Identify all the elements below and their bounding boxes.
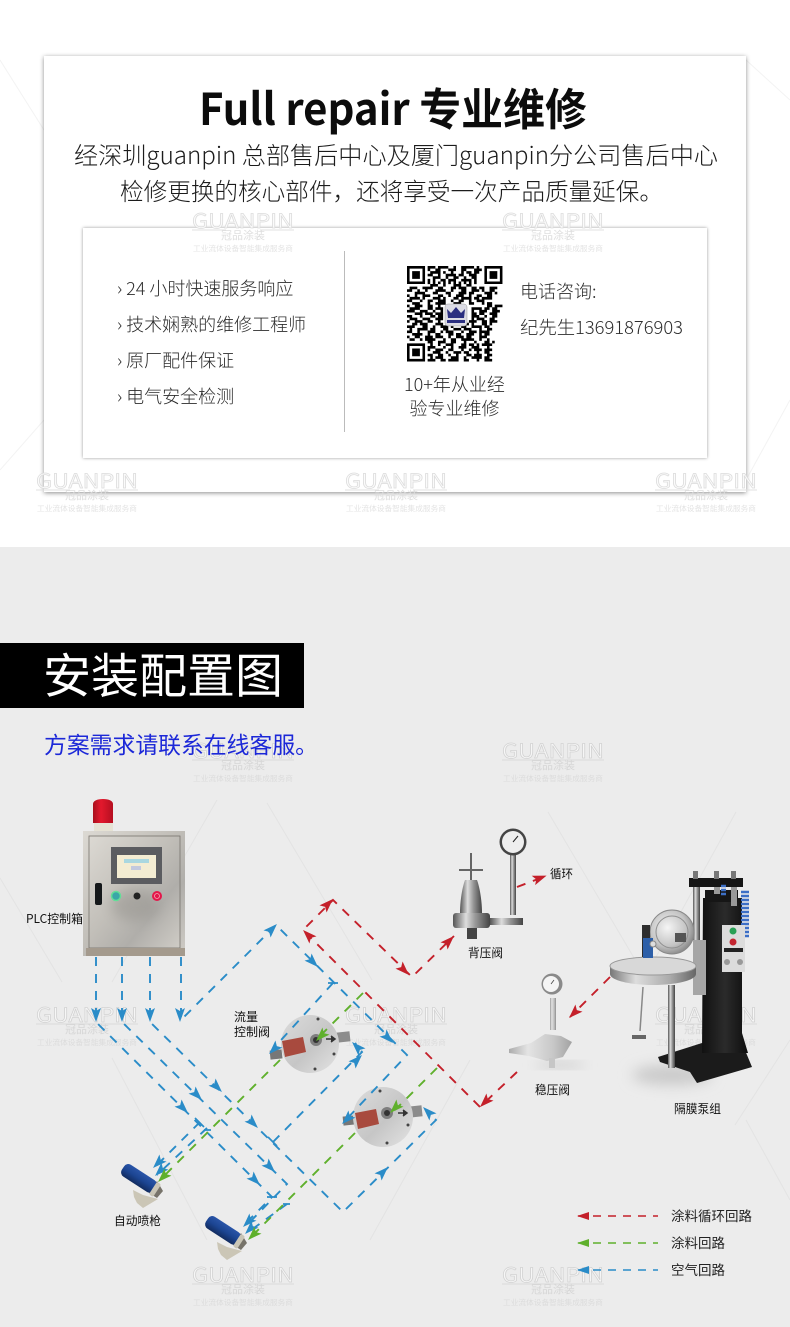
watermarks: GUANPIN [345,465,447,494]
blue air lines [96,925,436,1233]
label: PLC control box: PLC控制箱 [26,910,83,927]
watermarks: GUANPIN [655,999,757,1028]
service list: › 电气安全检测 [117,383,234,409]
watermarks: 工业流体设备智能集成服务商 [656,503,757,514]
QR caption [404,371,505,421]
icon: back pressure valve [453,828,526,939]
watermarks: 冠品涂装 [374,487,418,503]
service list: › 技术娴熟的维修工程师 [117,311,306,337]
red circulation lines [303,876,610,1107]
watermarks: 冠品涂装 [531,227,575,243]
label: back pressure valve: 背压阀 [468,944,503,961]
watermarks: 冠品涂装 [221,227,265,243]
label: flow control valve [234,1008,270,1040]
description text: 检修更换的核心部件，还将享受一次产品质量延保。 [120,172,663,207]
subtitle: 方案需求请联系在线客服。 [44,726,318,760]
green paint lines [160,993,437,1238]
service list: › 原厂配件保证 [117,347,234,373]
watermarks: 工业流体设备智能集成服务商 [346,1037,447,1048]
red circulation arrows [300,871,582,1110]
watermarks: 工业流体设备智能集成服务商 [503,773,604,784]
watermarks: GUANPIN [192,205,294,234]
watermarks: 冠品涂装 [531,1281,575,1297]
icon: diaphragm pump unit [610,871,752,1085]
legend: paint loop [577,1232,725,1252]
QR caption: 10+年从业经 [404,371,505,397]
icon: PLC control box [83,799,185,956]
icon: spray gun top [119,1162,163,1208]
watermarks [36,205,757,1308]
watermarks: GUANPIN [36,999,138,1028]
watermarks: 冠品涂装 [221,757,265,773]
label: flow control valve: 流量 [234,1008,258,1025]
watermarks: 工业流体设备智能集成服务商 [193,243,294,254]
watermarks: 冠品涂装 [374,1021,418,1037]
icon: flow control valve bottom [343,1087,423,1147]
watermarks: GUANPIN [502,735,604,764]
service list [117,275,306,409]
watermarks: 工业流体设备智能集成服务商 [503,243,604,254]
watermarks: 冠品涂装 [65,487,109,503]
watermarks: 工业流体设备智能集成服务商 [37,1037,138,1048]
watermarks: 工业流体设备智能集成服务商 [346,503,447,514]
watermarks: 工业流体设备智能集成服务商 [503,1297,604,1308]
watermarks: GUANPIN [36,465,138,494]
watermarks: GUANPIN [192,735,294,764]
watermarks: 冠品涂装 [531,757,575,773]
description text [74,136,718,207]
service list: › 24 小时快速服务响应 [117,275,293,301]
watermarks: 工业流体设备智能集成服务商 [193,773,294,784]
legend: air loop [577,1259,725,1279]
blue air arrows [91,921,436,1237]
watermarks: 冠品涂装 [65,1021,109,1037]
legend: air loop: 空气回路 [671,1259,725,1279]
green paint arrows [155,1028,403,1243]
contact details [520,278,683,340]
legend [577,1205,752,1279]
legend: paint loop: 涂料回路 [671,1232,725,1252]
section heading bar: 安装配置图 [43,638,283,707]
panel: repair service card [44,56,746,492]
watermarks: GUANPIN [655,465,757,494]
label: flow control valve: 控制阀 [234,1023,270,1040]
label: spray gun: 自动喷枪 [114,1212,161,1229]
page background: grey section [0,547,790,1327]
watermarks: 工业流体设备智能集成服务商 [193,1297,294,1308]
icon: flow control valve top [270,1015,350,1073]
installation diagram [26,799,752,1279]
legend: paint circulation loop: 涂料循环回路 [671,1205,752,1225]
label: diaphragm pump unit: 隔膜泵组 [674,1100,721,1117]
watermarks: GUANPIN [502,205,604,234]
watermarks: 冠品涂装 [684,1021,728,1037]
contact details: 纪先生13691876903 [520,314,683,340]
watermarks: GUANPIN [192,1259,294,1288]
panel: service details box [83,228,707,458]
QR centre logo [445,304,467,326]
watermarks: 工业流体设备智能集成服务商 [37,503,138,514]
watermarks: 冠品涂装 [684,487,728,503]
watermarks: GUANPIN [502,1259,604,1288]
icon: pressure regulator [509,974,586,1068]
watermarks: 工业流体设备智能集成服务商 [656,1037,757,1048]
icon: spray gun bottom [203,1214,247,1260]
watermarks: GUANPIN [345,999,447,1028]
QR code [407,266,502,361]
description text: 经深圳guanpin 总部售后中心及厦门guanpin分公司售后中心 [74,136,718,171]
legend: paint circulation loop [577,1205,752,1225]
QR caption: 验专业维修 [410,395,500,421]
watermarks: 冠品涂装 [221,1281,265,1297]
label: pressure regulator: 稳压阀 [535,1081,570,1098]
title: Full repair 专业维修 [199,74,587,138]
page background: white section [0,0,790,547]
label: circulation: 循环 [550,865,573,882]
contact details: 电话咨询: [520,278,596,304]
